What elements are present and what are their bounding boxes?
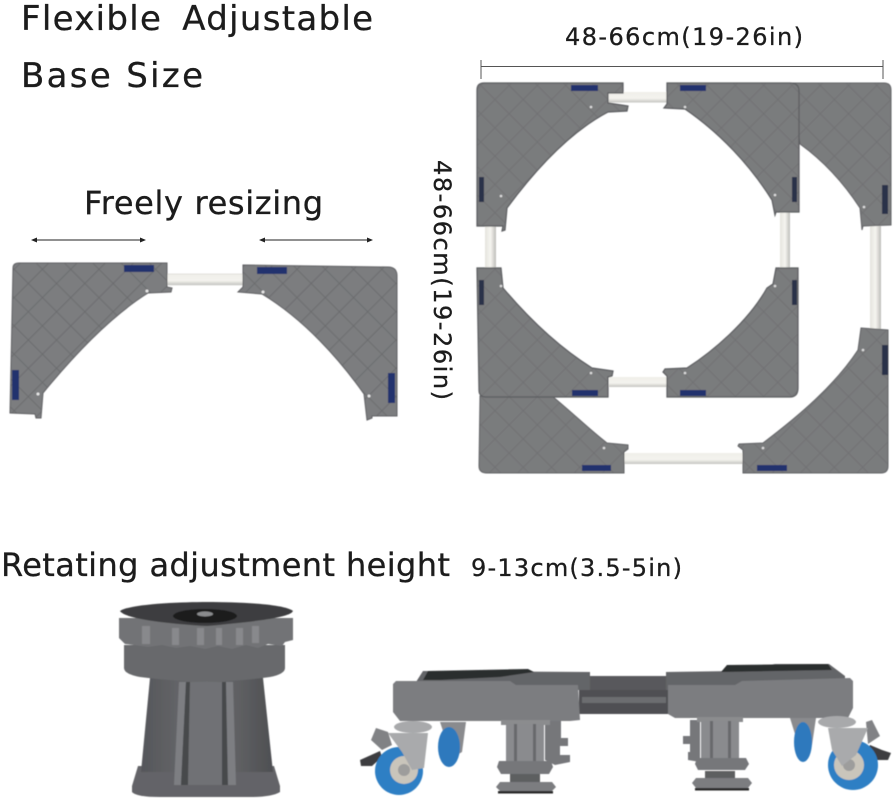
tube: middle short bar (609, 377, 668, 387)
title: flexible adjustable base size: Flexible Adjustable (21, 0, 373, 39)
panel: front top-left corner (477, 83, 628, 231)
panel: right corner piece (238, 265, 397, 420)
diagram: two-corner base section (10, 263, 397, 420)
diagram: four-corner adjustable frame (477, 83, 891, 473)
wheel: rear left caster (438, 722, 466, 767)
foot: ribbed column (141, 678, 273, 772)
heading: freely resizing: Freely resizing (84, 184, 323, 222)
foot: front left (496, 720, 556, 794)
dimension: width line (481, 60, 883, 79)
foot: dark top disc (120, 602, 293, 626)
tube: connecting bar (167, 274, 243, 285)
panel: back bottom-right corner (738, 328, 888, 473)
panel: left corner piece (10, 263, 172, 418)
base: right body (668, 678, 853, 718)
base: telescoping centre tube (579, 676, 669, 714)
foot: base plate (132, 766, 280, 797)
tube: left short bar (485, 212, 496, 268)
foot: rear right (683, 720, 700, 762)
tube: bottom long bar (624, 453, 744, 464)
wheel: front left caster (360, 721, 432, 795)
dimension: depth label: 48-66cm(19-26in) (428, 160, 456, 400)
wheel: front right caster (818, 716, 891, 790)
panel: back bottom-left corner (479, 396, 628, 473)
arrows: resizing directions (31, 238, 373, 242)
base: rear rails and pads (416, 664, 845, 690)
title: flexible adjustable base size: Base Size (21, 56, 203, 96)
panel: front bottom-right corner (663, 268, 798, 397)
base: left body (393, 681, 580, 721)
panel: front bottom-left corner (477, 268, 613, 397)
tube: top short bar (608, 92, 668, 102)
foot: lower collar (124, 645, 285, 682)
heading: rotating adjustment height: Retating adjustment height (1, 546, 450, 584)
foot: column ribs (174, 682, 236, 785)
title: flexible adjustable base size (21, 0, 373, 96)
panel: front top-right corner (664, 83, 799, 215)
foot: knurl highlights (142, 626, 259, 645)
photo: base with casters (360, 664, 891, 795)
foot: centre bolt (173, 609, 237, 623)
wheel: rear right caster (790, 718, 816, 762)
dimension: width label: 48-66cm(19-26in) (565, 23, 803, 51)
foot: rear left (545, 720, 570, 765)
photo: adjustable foot (119, 602, 293, 797)
foot: front right (692, 717, 752, 790)
panel: back top-right corner (790, 83, 891, 230)
foot: upper knurled ring (119, 618, 293, 649)
tube: right long bar (870, 226, 881, 332)
dimension: height range: 9-13cm(3.5-5in) (471, 554, 682, 582)
tube: centre short bar (780, 212, 790, 268)
